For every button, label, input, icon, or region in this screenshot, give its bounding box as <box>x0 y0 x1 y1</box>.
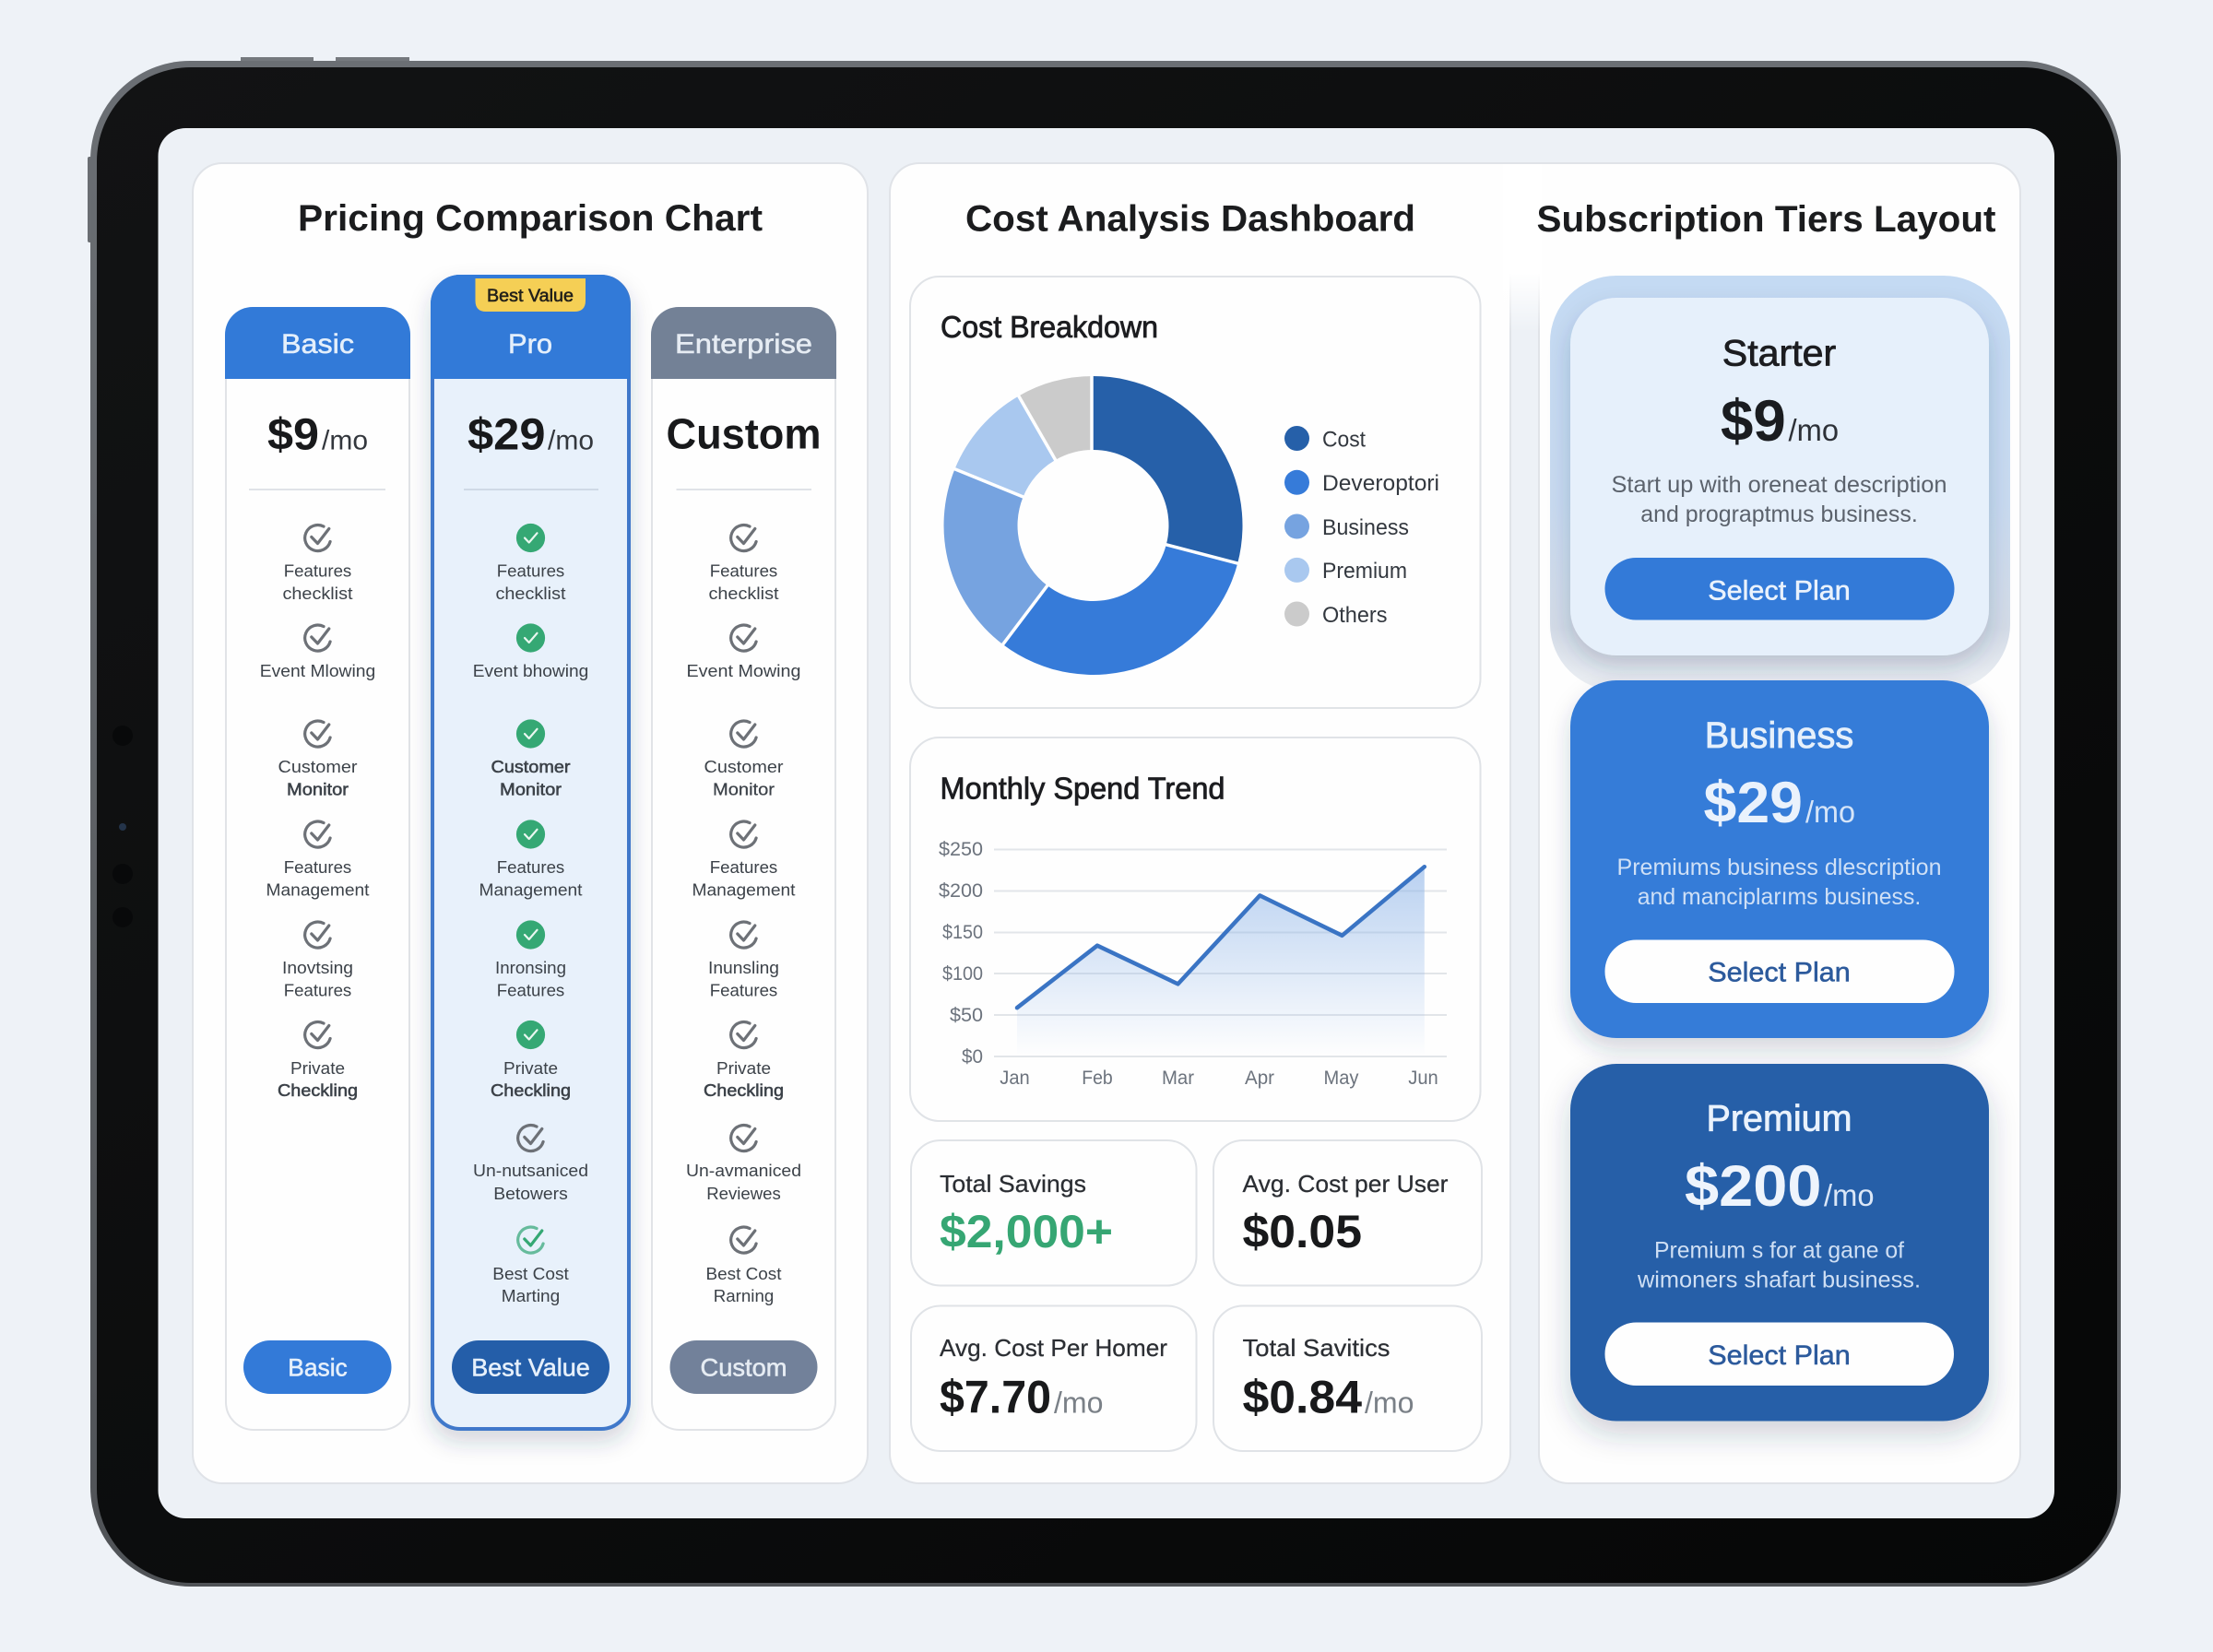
donut chart <box>944 374 1243 675</box>
price: basic: $9 <box>267 411 319 459</box>
button: select plan: Select Plan <box>1708 575 1851 607</box>
badge: best value <box>476 278 586 312</box>
feature: features management <box>692 821 795 900</box>
button: select plan <box>1604 940 1955 1003</box>
feature: features management: Features <box>284 857 351 877</box>
panel: subscription tiers layout <box>1471 163 2020 1483</box>
description: premium: Premium s for at gane of <box>1654 1237 1904 1263</box>
x axis labels <box>1000 1068 1438 1089</box>
stat card: total savitics: /mo <box>1365 1386 1414 1420</box>
y axis labels: $250 <box>939 839 983 860</box>
description: business: and manciplarıms business. <box>1638 884 1921 910</box>
feature: inunsling features <box>708 922 779 999</box>
feature: features management: Features <box>710 857 777 877</box>
feature: customer monitor <box>704 721 784 798</box>
button: select plan: Select Plan <box>1708 957 1851 988</box>
button: custom: Custom <box>701 1353 787 1381</box>
button: basic <box>243 1340 391 1394</box>
heading: subscription tiers layout: Subscription Tiers Layout <box>1536 199 1995 240</box>
feature: event bhowing <box>473 623 588 680</box>
column header: enterprise: Enterprise <box>675 329 812 360</box>
legend item: business: Business <box>1322 515 1409 540</box>
stat card: total savitics: Total Savitics <box>1243 1334 1391 1362</box>
stat card: average cost per homer: Avg. Cost Per Homer <box>940 1334 1167 1362</box>
feature: customer monitor: Monitor <box>713 780 775 798</box>
legend item: cost <box>1284 426 1366 452</box>
x axis labels: Jun <box>1408 1068 1438 1089</box>
price: custom: Custom <box>666 409 821 457</box>
spend area <box>1017 867 1425 1056</box>
feature: features checklist: checklist <box>282 584 352 603</box>
column header: pro <box>431 275 630 379</box>
description: starter: Start up with oreneat description <box>1612 472 1947 498</box>
price: business <box>1704 771 1855 835</box>
feature: customer monitor: Monitor <box>500 780 562 798</box>
button: custom <box>669 1340 817 1394</box>
price: premium <box>1685 1154 1874 1219</box>
feature: inronsing features: Features <box>497 981 564 999</box>
card: monthly spend trend <box>910 738 1481 1121</box>
feature: features management <box>266 821 369 900</box>
legend item: business <box>1284 514 1409 540</box>
feature: best cost marting: Best Cost <box>492 1264 569 1283</box>
feature: customer monitor <box>278 721 358 798</box>
feature: features checklist: checklist <box>708 584 778 603</box>
legend item: cost: Cost <box>1322 428 1366 452</box>
spend line <box>1017 867 1425 1008</box>
feature: inunsling features: Inunsling <box>708 958 779 977</box>
feature: features management: Management <box>479 879 583 900</box>
price: basic: /mo <box>322 426 368 455</box>
stat card: total savings: $2,000+ <box>940 1206 1113 1257</box>
tablet screen <box>159 128 2054 1518</box>
feature: customer monitor: Customer <box>278 757 358 776</box>
price: business: $29 <box>1704 771 1803 835</box>
feature: features management: Management <box>266 879 369 900</box>
feature list: pro <box>473 524 588 1305</box>
price: basic <box>267 411 368 459</box>
feature: best cost marting <box>492 1227 569 1305</box>
description: starter <box>1612 472 1947 527</box>
price: pro <box>467 411 594 459</box>
x axis labels: May <box>1324 1068 1359 1089</box>
feature: features checklist <box>496 524 566 603</box>
feature: private checkling: Private <box>290 1058 345 1078</box>
card: cost breakdown <box>910 277 1481 708</box>
stat card: total savings <box>911 1140 1197 1285</box>
feature: features management: Features <box>497 857 564 877</box>
column: enterprise <box>651 307 836 1430</box>
card title: cost breakdown: Cost Breakdown <box>941 310 1158 344</box>
feature: private checkling <box>278 1022 358 1100</box>
tier card: starter <box>1550 276 2010 690</box>
x axis labels: Apr <box>1245 1068 1274 1089</box>
description: premium <box>1637 1237 1921 1292</box>
button: select plan <box>1604 558 1955 620</box>
column: pro (highlighted) <box>431 275 630 1429</box>
button: select plan <box>1604 1322 1954 1386</box>
feature: inunsling features: Features <box>710 981 777 999</box>
feature: features checklist <box>282 525 352 603</box>
feature: un-avmaniced reviewes <box>686 1126 801 1203</box>
feature: event mlowing <box>260 625 375 680</box>
y axis labels: $200 <box>939 880 983 902</box>
legend item: others: Others <box>1322 603 1387 628</box>
column header: basic: Basic <box>281 329 354 360</box>
column header: basic <box>225 307 410 379</box>
price: starter: /mo <box>1789 413 1839 447</box>
tier card: premium: Premium <box>1706 1099 1852 1139</box>
description: starter: and prograptmus business. <box>1640 502 1918 527</box>
y axis labels <box>939 839 983 1068</box>
feature: private checkling: Private <box>503 1058 558 1078</box>
feature: un-avmaniced reviewes: Reviewes <box>706 1184 781 1203</box>
feature: inovtsing features: Inovtsing <box>282 958 353 977</box>
badge: best value: Best Value <box>487 287 574 306</box>
panel: pricing comparison chart <box>193 163 868 1483</box>
legend item: premium <box>1284 558 1407 584</box>
button: best value <box>452 1340 609 1394</box>
x axis labels: Mar <box>1162 1068 1194 1089</box>
column: basic <box>225 307 410 1430</box>
feature list: basic <box>260 525 375 1100</box>
stat card: total savitics: $0.84 <box>1243 1372 1362 1423</box>
stat card: total savings: Total Savings <box>940 1170 1086 1198</box>
tier card: starter: Starter <box>1722 334 1836 374</box>
heading: pricing comparison chart: Pricing Comparison Chart <box>298 198 763 239</box>
feature: un-nutsaniced betowers: Un-nutsaniced <box>473 1161 588 1180</box>
legend item: premium: Premium <box>1322 559 1407 584</box>
heading: cost analysis dashboard: Cost Analysis Dashboard <box>965 199 1415 240</box>
column header: enterprise <box>651 307 836 379</box>
price: business: /mo <box>1805 795 1855 829</box>
feature: event mowing: Event Mowing <box>686 661 800 680</box>
column header: pro: Pro <box>508 329 552 360</box>
feature: event mowing <box>686 625 800 680</box>
feature: best cost rarning <box>706 1227 782 1305</box>
feature: customer monitor: Customer <box>491 757 570 776</box>
feature: un-avmaniced reviewes: Un-avmaniced <box>686 1161 801 1180</box>
feature: inronsing features: Inronsing <box>495 958 566 977</box>
feature: un-nutsaniced betowers <box>473 1126 588 1203</box>
feature: inronsing features <box>495 920 566 999</box>
feature: un-nutsaniced betowers: Betowers <box>493 1184 568 1203</box>
feature: features checklist <box>708 525 778 603</box>
stat card: average cost per user: $0.05 <box>1243 1206 1362 1257</box>
stat card: average cost per homer: /mo <box>1054 1386 1103 1420</box>
stat card: total savitics <box>1213 1305 1482 1451</box>
price: pro: /mo <box>548 426 594 455</box>
feature: customer monitor <box>491 719 570 798</box>
price: premium: $200 <box>1685 1154 1822 1219</box>
feature: features checklist: Features <box>497 560 564 581</box>
stat card: average cost per user: Avg. Cost per User <box>1243 1170 1449 1198</box>
panel: cost analysis dashboard <box>890 163 1510 1483</box>
price: starter <box>1721 389 1839 454</box>
feature: best cost marting: Marting <box>502 1286 560 1305</box>
feature: private checkling: Checkling <box>491 1080 571 1100</box>
description: premium: wimoners shafart business. <box>1637 1267 1921 1292</box>
feature: features checklist: Features <box>710 560 777 581</box>
line chart <box>939 839 1447 1089</box>
tier card: business <box>1570 680 1989 1038</box>
y axis labels: $100 <box>942 963 983 985</box>
price: premium: /mo <box>1824 1178 1874 1212</box>
x axis labels: Feb <box>1082 1068 1113 1089</box>
y axis labels: $150 <box>942 922 983 943</box>
stat card: average cost per user <box>1213 1140 1482 1285</box>
button: select plan: Select Plan <box>1708 1340 1851 1371</box>
legend <box>1284 426 1439 628</box>
price: starter: $9 <box>1721 389 1786 454</box>
feature: private checkling <box>491 1021 571 1100</box>
feature: private checkling: Checkling <box>278 1080 358 1100</box>
feature: private checkling: Private <box>716 1058 771 1078</box>
y axis labels: $0 <box>962 1046 983 1068</box>
button: basic: Basic <box>288 1353 348 1381</box>
card title: monthly spend trend: Monthly Spend Trend <box>941 771 1225 806</box>
description: business <box>1617 855 1942 910</box>
feature: features checklist: Features <box>284 560 351 581</box>
feature: event bhowing: Event bhowing <box>473 661 588 680</box>
y axis labels: $50 <box>950 1005 983 1026</box>
feature: features management: Management <box>692 879 795 900</box>
legend item: others <box>1284 601 1387 628</box>
feature: best cost rarning: Rarning <box>714 1286 774 1305</box>
feature: event mlowing: Event Mlowing <box>260 661 375 680</box>
feature: customer monitor: Monitor <box>287 780 349 798</box>
description: business: Premiums business dlescription <box>1617 855 1942 880</box>
feature: inovtsing features <box>282 922 353 999</box>
feature: features management <box>479 820 583 900</box>
feature: customer monitor: Customer <box>704 757 784 776</box>
tier card: business: Business <box>1705 715 1853 756</box>
stat card: average cost per homer: $7.70 <box>940 1372 1051 1423</box>
feature: inovtsing features: Features <box>284 981 351 999</box>
button: best value: Best Value <box>471 1353 590 1381</box>
tier card: premium <box>1570 1064 1989 1422</box>
feature: private checkling: Checkling <box>704 1080 784 1100</box>
feature list: enterprise <box>686 525 801 1305</box>
feature: best cost rarning: Best Cost <box>706 1264 782 1283</box>
legend item: deveroptori: Deveroptori <box>1322 471 1439 496</box>
feature: features checklist: checklist <box>496 584 566 603</box>
stat card: average cost per homer <box>911 1305 1197 1451</box>
x axis labels: Jan <box>1000 1068 1030 1089</box>
price: pro: $29 <box>467 411 546 459</box>
feature: private checkling <box>704 1022 784 1100</box>
